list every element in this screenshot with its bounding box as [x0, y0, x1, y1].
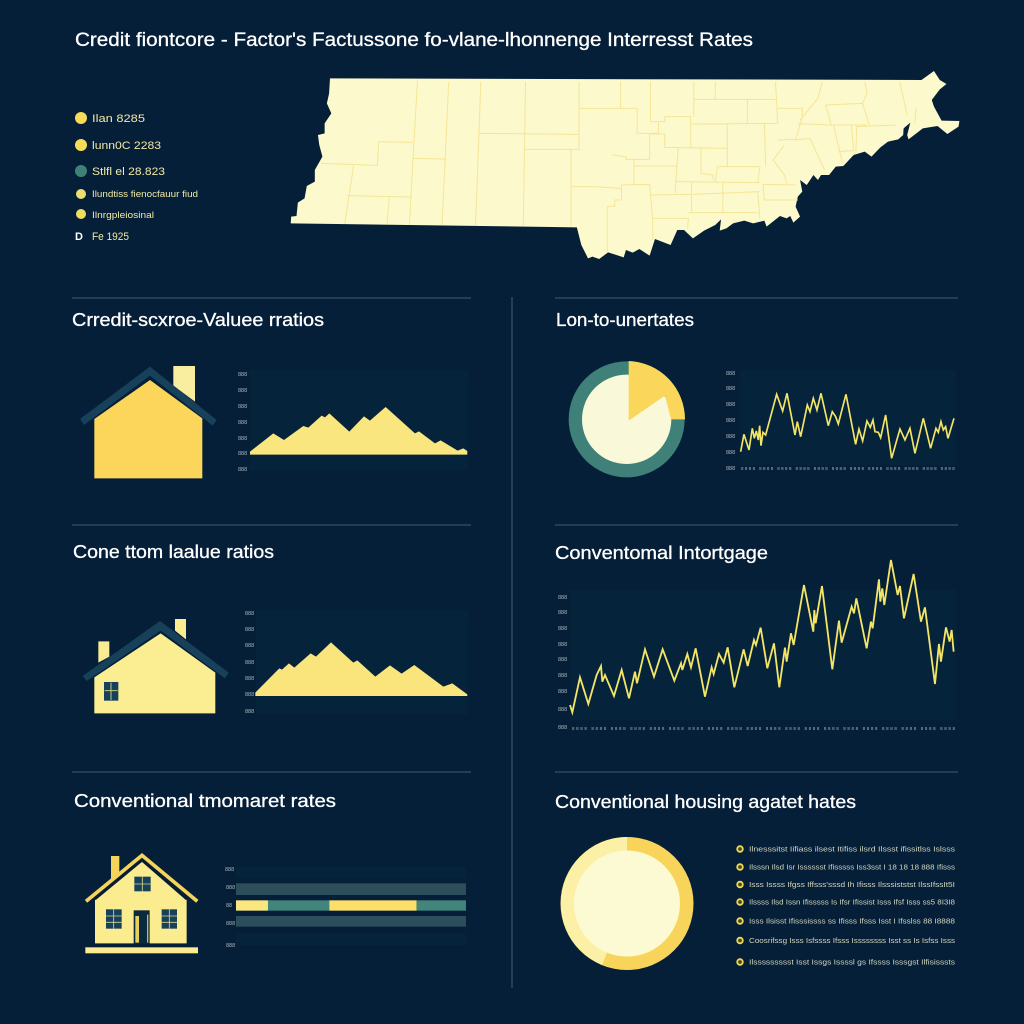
heading: credit score value ratios: Crredit-scxroe-Valuee rratios [72, 310, 324, 330]
heading: conventional market rates: Conventional tmomaret rates [74, 791, 336, 811]
area chart 2: 888 [245, 692, 254, 698]
bullet list: Ilssss Ilsd Issn Ifisssss Is Ifsr Ifissist Isss Ifsf Isss ss5 8I3I8 [749, 898, 955, 906]
area chart 1: 888 [238, 451, 247, 457]
bullet list: Ilsssn Ilsd Isr Isssssst Ifisssss Iss3sst I 18 18 18 888 Ifisss [749, 862, 955, 872]
line chart 2: 888 [558, 610, 567, 616]
area chart 2: 888 [245, 660, 254, 666]
line chart 2: 888 [558, 642, 567, 648]
bar chart: 888 [226, 943, 235, 949]
legend: Stlfl el 28.823 [92, 166, 165, 178]
legend: lunn0C 2283 [92, 140, 161, 152]
line chart 1 [726, 370, 956, 472]
bullet list [737, 844, 955, 966]
line chart 1: 888 [726, 450, 735, 456]
line chart 2: 888 [558, 626, 567, 632]
line chart 2: 888 [558, 657, 567, 663]
bullet list: Coosrifssg Isss Isfssss Ifsss Issssssss Isst ss Is Isfss Isss [749, 936, 955, 945]
bar chart [225, 867, 466, 949]
legend: Fe 1925 [92, 231, 129, 243]
line chart 1: 888 [726, 418, 735, 424]
bullet list: Ilssssssssst Isst Issgs Issssl gs Ifssss Isssgst Ilfisisssts [749, 958, 955, 966]
legend [75, 112, 198, 243]
legend: Ilnrgpleiosinal [92, 210, 154, 221]
line chart 2: 8888 8888 8888 8888 8888 8888 8888 8888 8888 8888 8888 8888 8888 8888 8888 8888 8888 8888 8888 8888 [572, 726, 955, 731]
legend: Ilundtiss fienocfauur fiud [92, 189, 198, 200]
bullet list: Ilnesssitst Iifiass ilsest Itifiss ilsrd Ilssst ifissitlss Islsss [749, 844, 955, 854]
bar chart: 88 [226, 903, 232, 909]
area chart 2: 888 [245, 643, 254, 649]
line chart 1: 888 [726, 386, 735, 392]
line chart 2: 888 [558, 595, 567, 601]
heading: cone from value ratios: Cone ttom laalue ratios [73, 542, 274, 562]
icon: house 3 [85, 855, 198, 953]
line chart 2: 888 [558, 707, 567, 713]
line chart 1: 888 [726, 466, 735, 472]
bar chart: 888 [226, 921, 235, 927]
area chart 1: 888 [238, 436, 247, 442]
area chart 2: 888 [245, 627, 254, 633]
area chart 1 [238, 370, 468, 473]
bar chart: 888 [226, 885, 235, 891]
line chart 1: 8888 8888 8888 8888 8888 8888 8888 8888 8888 8888 8888 8888 [741, 466, 955, 471]
bullet list: Isss Issss Ifgss Iffsss'sssd Ih Ifisss Ilsssiststst IlssIfssIt5I [749, 880, 955, 889]
area chart 1: 888 [238, 467, 247, 473]
line chart 2: 888 [558, 689, 567, 695]
area chart 1: 888 [238, 388, 247, 394]
title: Credit fiontcore - Factor's Factussone fo-vlane-lhonnenge Interresst Rates [75, 30, 753, 51]
legend: Ilan 8285 [92, 113, 145, 125]
heading: conventional mortgage: Conventomal Intortgage [555, 543, 768, 563]
line chart 1: 888 [726, 402, 735, 408]
line chart 2 [558, 560, 956, 731]
area chart 2 [245, 610, 468, 715]
line chart 2: 888 [558, 725, 567, 731]
area chart 1: 888 [238, 420, 247, 426]
bullet list: Isss Ilsisst Ifisssissss ss Ifisss Ifsss Isst I Ifsslss 88 I8888 [749, 916, 955, 926]
area chart 2: 888 [245, 611, 254, 617]
donut chart 1 [569, 361, 685, 477]
donut chart 2 [560, 837, 694, 970]
line chart 2: 888 [558, 673, 567, 679]
icon: house 1 [80, 366, 217, 478]
icon: house 2 [83, 619, 229, 713]
line chart 1: 888 [726, 434, 735, 440]
bar chart: 888 [225, 867, 234, 873]
line chart 1: 888 [726, 371, 735, 377]
heading: loan to rates: Lon-to-unertates [556, 310, 694, 330]
area chart 2: 888 [245, 676, 254, 682]
heading: conventional housing market rates: Conventional housing agatet hates [555, 792, 856, 812]
legend: D [75, 231, 83, 243]
area chart 1: 888 [238, 372, 247, 378]
area chart 1: 888 [238, 404, 247, 410]
map [291, 71, 959, 259]
area chart 2: 888 [245, 709, 254, 715]
